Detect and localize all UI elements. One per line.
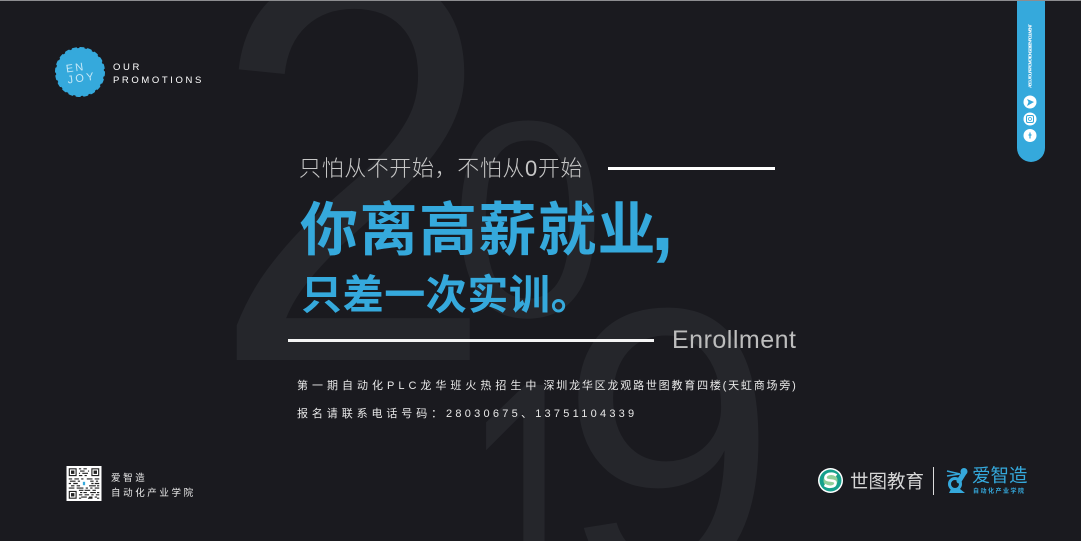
- icon: facebook: [1024, 129, 1036, 142]
- vertical micro text: ABOUT OUR PROMOTIONS 2019 ENROLLMENT: [1028, 24, 1032, 88]
- heading: our promotions: OUR: [113, 62, 142, 73]
- heading: our promotions: PROMOTIONS: [113, 74, 204, 86]
- heading: our promotions: [113, 62, 204, 86]
- top edge line: [0, 0, 1081, 1]
- lower rule: [288, 339, 654, 342]
- icon: robot arm: [946, 468, 968, 493]
- qr code: [66, 466, 102, 501]
- main headline: 你离高薪就业,: [300, 177, 675, 268]
- enrollment label: Enrollment: [672, 326, 796, 354]
- icon: instagram: [1024, 112, 1036, 126]
- logo: shitu education: [818, 468, 843, 493]
- sub headline: 只差一次实训。: [301, 272, 592, 318]
- icon: play: [1024, 96, 1036, 108]
- badge: enjoy: [55, 47, 105, 97]
- logo text: aizhizao: 爱智造: [972, 465, 1028, 486]
- phone line: 报名请联系电话号码：28030675、13751104339: [297, 408, 637, 420]
- logo text: shitu: 世图教育: [850, 471, 924, 492]
- badge: enjoy: JOY: [67, 71, 97, 86]
- qr caption: 爱智造: [111, 473, 147, 484]
- badge: enjoy: EN: [65, 61, 86, 75]
- background year 2019: 0: [450, 64, 606, 376]
- upper rule: [608, 167, 775, 170]
- tagline: 只怕从不开始，不怕从0开始: [299, 156, 583, 181]
- side pill with social icons: [1017, 1, 1045, 162]
- qr caption: 自动化产业学院: [111, 488, 196, 499]
- logo subtitle: 自动化产业学院: [973, 489, 1026, 495]
- class and address line: 第一期自动化PLC龙华班火热招生中 深圳龙华区龙观路世图教育四楼(天虹商场旁): [297, 380, 798, 392]
- logo divider: [933, 467, 934, 495]
- qr caption: [111, 472, 196, 499]
